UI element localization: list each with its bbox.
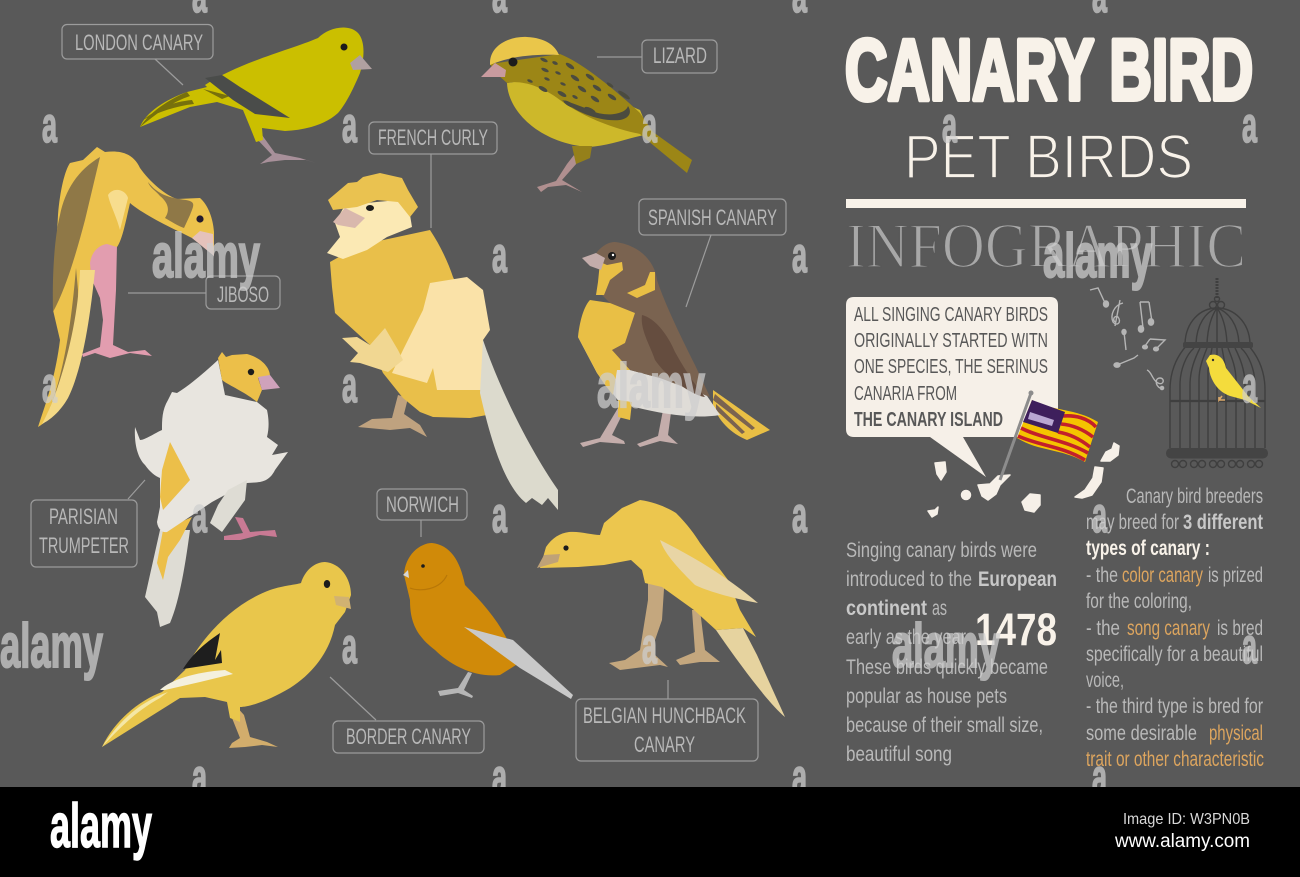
footer logo: alamy: alamy bbox=[50, 792, 152, 861]
subtitle: Pet Birds: PET BIRDS bbox=[904, 123, 1193, 192]
watermarks: a bbox=[342, 357, 358, 413]
speech bubble: origin: ORIGINALLY STARTED WITN bbox=[854, 330, 1048, 352]
text block: history of singing canaries: popular as house pets bbox=[846, 685, 1007, 708]
heading: Infographic: INFOGRAPHIC bbox=[846, 210, 1246, 281]
label: London canary: LONDON CANARY bbox=[75, 30, 203, 55]
watermarks: a bbox=[1092, 749, 1108, 805]
watermarks: a bbox=[342, 97, 358, 153]
watermarks: alamy bbox=[892, 612, 1000, 681]
text block: types of canary: some desirable bbox=[1086, 722, 1197, 745]
text block: types of canary: is prized bbox=[1208, 564, 1263, 587]
footer bar bbox=[0, 787, 1300, 877]
text block: types of canary: - the bbox=[1086, 564, 1118, 587]
title divider bar bbox=[846, 199, 1246, 208]
bird: Border canary bbox=[102, 562, 351, 748]
text block: history of singing canaries: because of their small size, bbox=[846, 714, 1043, 737]
label: Jiboso: JIBOSO bbox=[217, 282, 269, 307]
watermarks: a bbox=[192, 487, 208, 543]
label: Parisian trumpeter: TRUMPETER bbox=[39, 533, 129, 558]
watermarks: a bbox=[42, 97, 58, 153]
label: Lizard: LIZARD bbox=[653, 43, 707, 68]
text block: types of canary: color canary bbox=[1122, 564, 1203, 587]
speech bubble: origin: ONE SPECIES, THE SERINUS bbox=[854, 356, 1048, 378]
text block: history of singing canaries bbox=[846, 539, 1057, 766]
watermarks: a bbox=[192, 749, 208, 805]
speech bubble: origin: CANARIA FROM bbox=[854, 383, 957, 405]
watermarks: a bbox=[1242, 357, 1258, 413]
icon: flag on pole bbox=[1000, 390, 1098, 480]
number: year 1478: 1478 bbox=[975, 604, 1057, 655]
watermarks: a bbox=[492, 749, 508, 805]
speech bubble: origin: ALL SINGING CANARY BIRDS bbox=[854, 304, 1048, 326]
watermarks: alamy bbox=[0, 612, 103, 681]
speech bubble: origin: THE CANARY ISLAND bbox=[854, 409, 1003, 431]
watermarks: a bbox=[792, 227, 808, 283]
text block: types of canary: may breed for bbox=[1086, 511, 1179, 534]
watermarks: a bbox=[792, 487, 808, 543]
watermarks: a bbox=[642, 618, 658, 674]
text block: history of singing canaries: continent bbox=[846, 597, 927, 620]
text block: history of singing canaries: Singing canary birds were bbox=[846, 539, 1037, 562]
watermarks: alamy bbox=[597, 352, 705, 421]
watermarks: a bbox=[1092, 487, 1108, 543]
bird: London canary bbox=[140, 28, 372, 164]
bird: Jiboso canary bbox=[38, 147, 214, 427]
label: French curly bbox=[369, 122, 497, 228]
text block: types of canary: physical bbox=[1209, 722, 1263, 745]
map: Canary Islands bbox=[928, 443, 1119, 517]
label: Lizard bbox=[597, 40, 717, 73]
bird: Belgian hunchback canary bbox=[537, 500, 785, 717]
text block: history of singing canaries: as bbox=[932, 597, 947, 620]
watermarks: a bbox=[492, 227, 508, 283]
text block: types of canary: song canary bbox=[1127, 617, 1210, 640]
label: Spanish canary bbox=[639, 199, 786, 307]
text block: history of singing canaries: beautiful song bbox=[846, 743, 952, 766]
label: Parisian trumpeter bbox=[31, 480, 145, 567]
icon: music notes bbox=[1090, 288, 1165, 390]
bird: Lizard canary bbox=[481, 37, 692, 192]
text block: types of canary bbox=[1086, 485, 1264, 771]
label: Border canary bbox=[330, 677, 484, 753]
watermarks: alamy bbox=[1043, 222, 1152, 291]
label: Norwich bbox=[377, 489, 467, 537]
text block: history of singing canaries: early as the year bbox=[846, 626, 966, 649]
label: Norwich: NORWICH bbox=[386, 492, 459, 517]
text block: types of canary: types of canary : bbox=[1086, 537, 1210, 560]
label: Border canary: BORDER CANARY bbox=[346, 724, 471, 749]
watermarks: a bbox=[342, 618, 358, 674]
label: Belgian hunchback canary: CANARY bbox=[634, 732, 695, 757]
label: Belgian hunchback canary: BELGIAN HUNCHBACK bbox=[583, 703, 746, 728]
text block: types of canary: voice, bbox=[1086, 669, 1124, 692]
text block: types of canary: - the bbox=[1086, 617, 1120, 640]
watermarks: a bbox=[1242, 618, 1258, 674]
label: London canary bbox=[62, 24, 213, 85]
text block: history of singing canaries: These birds quickly became bbox=[846, 656, 1048, 679]
bird: Norwich canary bbox=[403, 543, 573, 699]
watermarks: a bbox=[42, 357, 58, 413]
label: Parisian trumpeter: PARISIAN bbox=[49, 504, 118, 529]
icon: bird cage with canary bbox=[1166, 278, 1268, 468]
bird: Parisian trumpeter bbox=[135, 352, 288, 627]
watermarks: a bbox=[642, 97, 658, 153]
text block: history of singing canaries: introduced to the bbox=[846, 568, 972, 591]
speech bubble: origin bbox=[846, 297, 1058, 477]
footer image id: Image ID: W3PN0B bbox=[1123, 811, 1250, 828]
watermarks: a bbox=[492, 487, 508, 543]
watermarks: alamy bbox=[152, 222, 260, 291]
text block: types of canary: for the coloring, bbox=[1086, 590, 1192, 613]
bird: French curly canary bbox=[327, 173, 558, 510]
watermarks: a bbox=[792, 749, 808, 805]
footer url: www.alamy.com bbox=[1114, 831, 1250, 852]
label: French curly: FRENCH CURLY bbox=[378, 125, 488, 150]
label: Belgian hunchback canary bbox=[576, 680, 758, 761]
text block: types of canary: 3 different bbox=[1183, 511, 1263, 534]
text block: types of canary: is bred bbox=[1217, 617, 1263, 640]
text block: history of singing canaries: European bbox=[978, 568, 1057, 591]
watermarks: a bbox=[1242, 97, 1258, 153]
label: Spanish canary: SPANISH CANARY bbox=[648, 205, 777, 230]
label: Jiboso bbox=[128, 276, 280, 309]
bird: Spanish canary bbox=[578, 242, 770, 447]
watermarks: a bbox=[942, 97, 958, 153]
